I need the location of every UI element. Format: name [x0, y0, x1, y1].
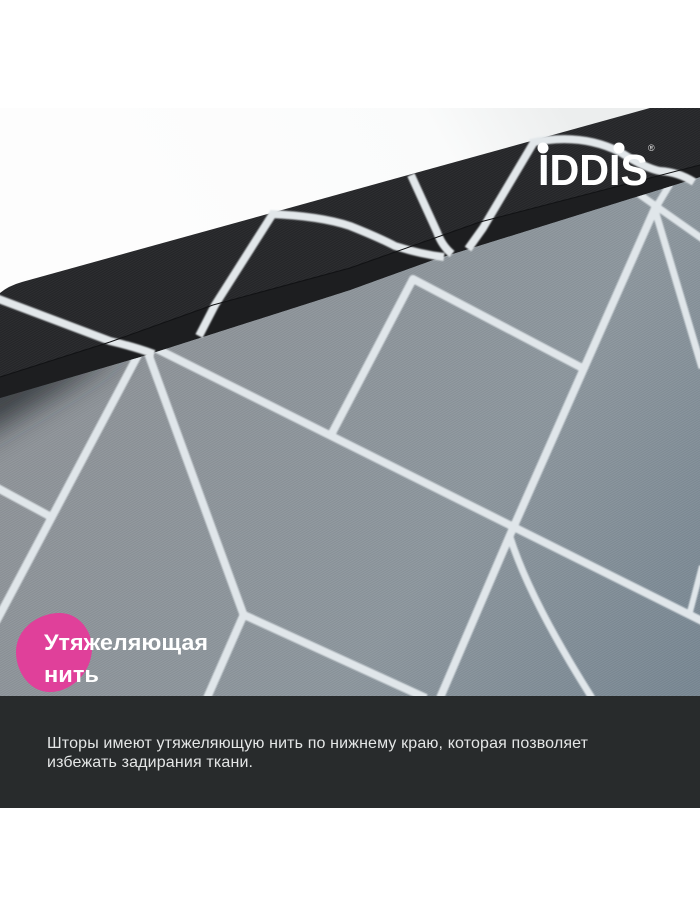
brand logo: iddis: ®: [648, 143, 655, 153]
heading: weighted thread: нить: [44, 662, 99, 687]
white lines on hem: [0, 139, 694, 354]
photo: shower curtain fabric: [0, 108, 700, 698]
caption text: избежать задирания ткани.: [47, 754, 253, 771]
dark caption panel: [0, 696, 700, 808]
heading: weighted thread: Утяжеляющая: [44, 630, 208, 655]
white geometric lines on grey panel: [0, 184, 700, 698]
white backdrop: [455, 108, 649, 154]
stitch line: [0, 165, 700, 377]
heading: weighted thread: [44, 634, 206, 682]
grey curtain panel: [0, 170, 700, 696]
caption text: Шторы имеют утяжеляющую нить по нижнему краю, которая позволяет: [47, 735, 589, 752]
caption text: [47, 735, 589, 771]
black hem of the curtain: [0, 108, 700, 398]
brand logo: iddis: IDDIS: [538, 146, 648, 195]
infographic canvas: [0, 108, 700, 808]
lower folded edge below stitch: [0, 165, 700, 398]
pink accent blob: [16, 613, 92, 692]
